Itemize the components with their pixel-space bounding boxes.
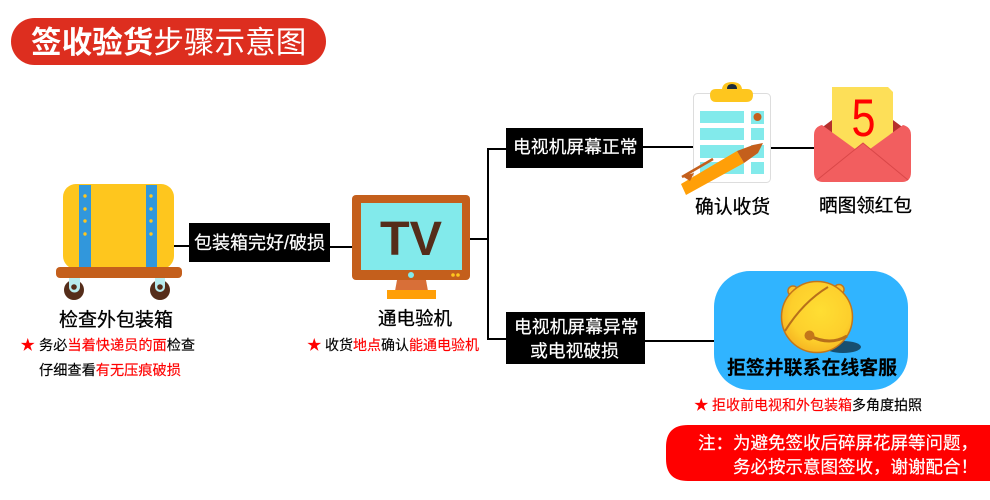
step: share photo for red packet <box>814 87 912 216</box>
icon: clipboard and pen <box>681 82 770 195</box>
step: power on TV <box>307 195 479 354</box>
label: screen abnormal or damaged: 电视机屏幕异常 <box>514 317 638 337</box>
title: 签收验货步骤示意图 <box>31 26 306 60</box>
label: refuse and contact support: 拒签并联系在线客服 <box>727 356 897 379</box>
label: confirm receipt: 确认收货 <box>695 196 770 217</box>
icon: TV <box>352 195 470 299</box>
label: box intact or damaged: 包装箱完好/破损 <box>194 233 325 253</box>
label: screen normal: 电视机屏幕正常 <box>513 137 637 157</box>
label: box intact or damaged <box>189 223 330 262</box>
note: check outer box: 仔细查看有无压痕破损 <box>39 363 181 379</box>
label: screen abnormal or damaged <box>506 312 645 364</box>
title <box>11 18 326 65</box>
note: photograph before refusing: 拒收前电视和外包装箱多角度拍照 <box>712 397 922 413</box>
heading: power on TV: 通电验机 <box>378 308 453 329</box>
icon: trolley box <box>56 184 182 300</box>
icon: red envelope with card: 5 <box>852 89 876 148</box>
callout: reminder: 为避免签收后碎屏花屏等问题， <box>733 430 978 455</box>
note: power on TV: ★ <box>307 338 322 354</box>
label: screen normal <box>506 128 643 168</box>
step: outer box on trolley <box>20 184 195 379</box>
step: confirm receipt <box>681 82 770 217</box>
note: check outer box <box>20 338 195 379</box>
note: check outer box: ★ <box>20 338 35 354</box>
panel: refuse and contact support <box>714 271 908 390</box>
heading: check outer box: 检查外包装箱 <box>59 309 173 331</box>
label: screen abnormal or damaged: 或电视破损 <box>530 341 619 361</box>
callout: reminder: 务必按示意图签收，谢谢配合！ <box>733 454 978 479</box>
note: check outer box: 务必当着快递员的面检查 <box>39 338 195 354</box>
callout: reminder: 注： <box>698 430 733 455</box>
callout: reminder <box>666 425 990 481</box>
note: photograph before refusing: ★ <box>694 398 708 414</box>
icon: bell <box>782 282 861 353</box>
note: power on TV: 收货地点确认能通电验机 <box>325 337 479 353</box>
icon: TV: TV <box>380 213 442 266</box>
connector lines <box>174 147 814 341</box>
label: share photo: 晒图领红包 <box>819 195 912 216</box>
